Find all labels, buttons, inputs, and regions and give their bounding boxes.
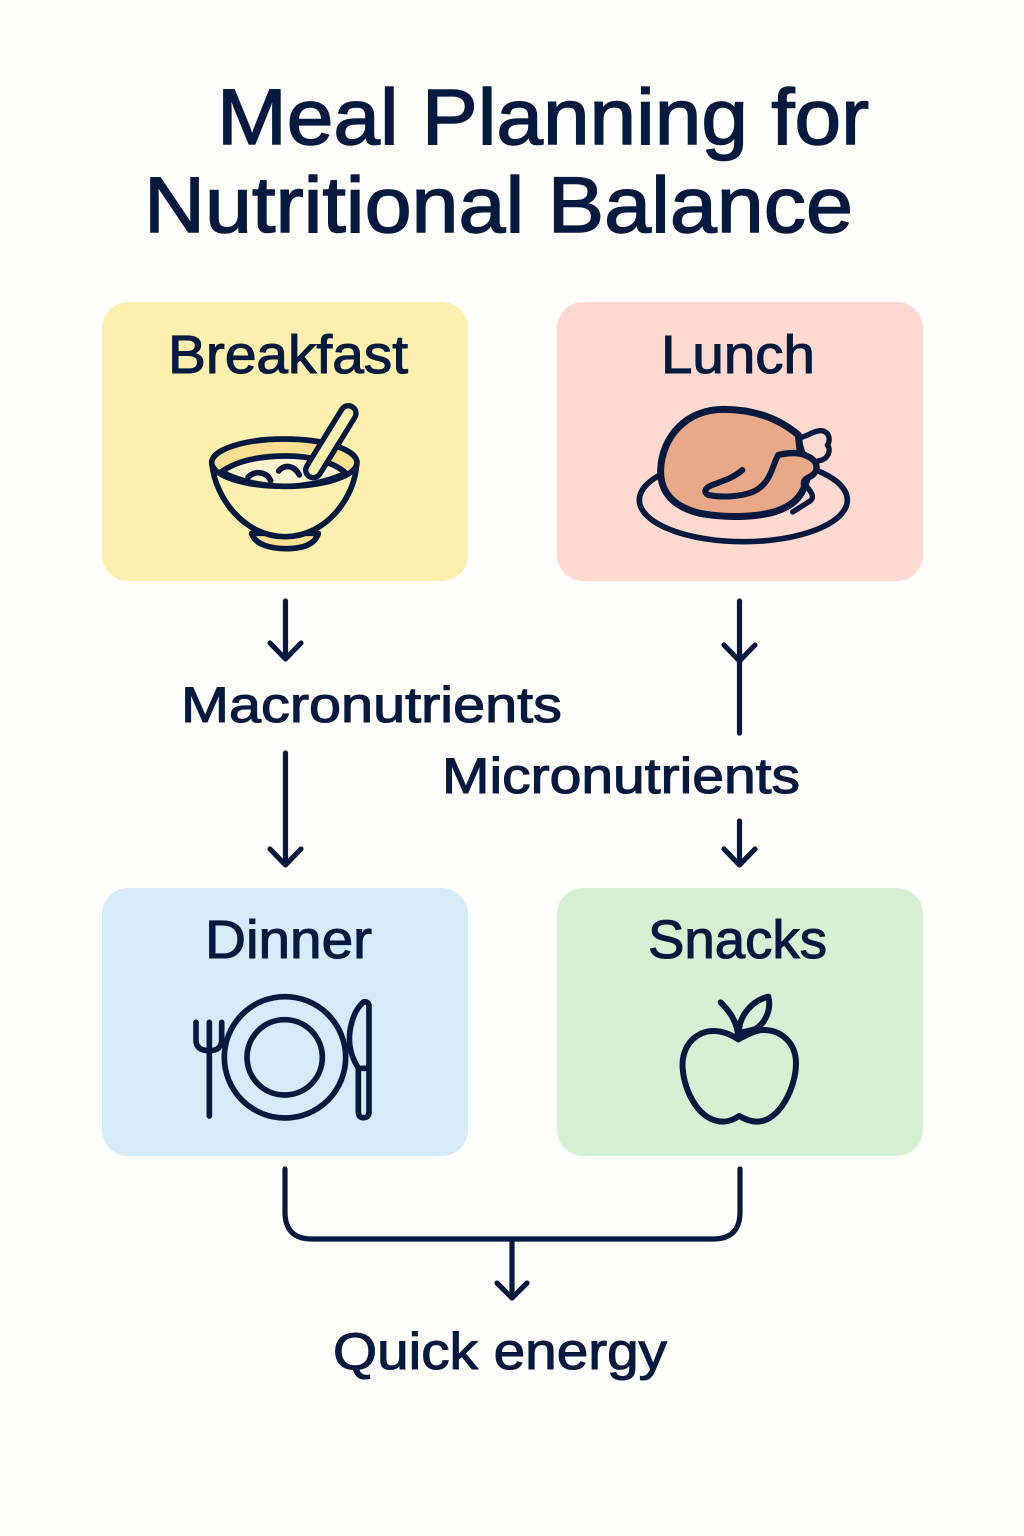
arrow: lunch down [724,601,755,733]
heading: snacks: Snacks [648,910,827,970]
panel: snacks [557,888,923,1156]
connector: dinner and snacks to quick energy [285,1169,740,1298]
arrow: macronutrients to dinner [270,753,301,865]
panel: dinner [102,888,468,1156]
arrow: micronutrients to snacks [724,821,755,865]
arrow: breakfast down [270,601,301,659]
label: micronutrients: Micronutrients [442,748,800,804]
icon: roast chicken on plate [639,409,847,542]
icon: plate with cutlery [196,997,369,1118]
heading: breakfast: Breakfast [168,325,408,385]
heading: dinner: Dinner [205,910,372,970]
heading: lunch: Lunch [661,325,815,385]
title: Meal Planning for [217,72,869,161]
label: macronutrients: Macronutrients [181,677,562,733]
panel: lunch [557,302,923,581]
icon: apple [683,997,796,1122]
title [144,72,869,249]
label: quick energy: Quick energy [333,1323,667,1381]
title: Nutritional Balance [144,160,853,249]
panel: breakfast [102,302,468,581]
icon: cereal bowl [212,413,357,549]
